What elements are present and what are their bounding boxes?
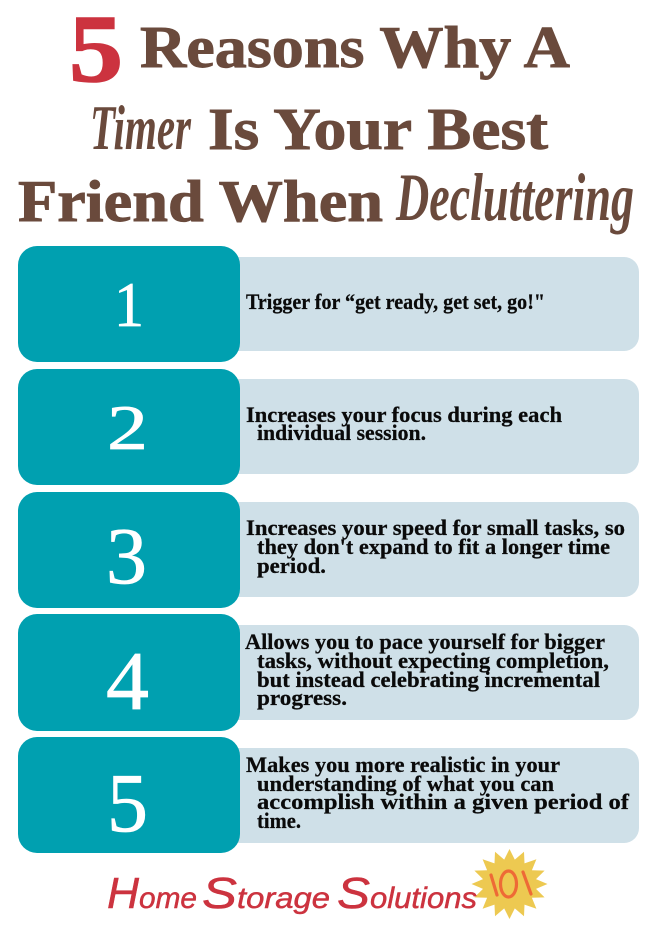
logo wordmark: ome <box>139 882 197 915</box>
row 3 text: they don't expand to fit a longer time <box>257 534 610 559</box>
row 5 number tile <box>18 737 240 853</box>
title line 1: Reasons Why A <box>140 14 570 80</box>
row 4 text: Allows you to pace yourself for bigger <box>245 629 605 654</box>
row 2 number: 2 <box>107 392 148 463</box>
title line 3: Friend When <box>18 168 383 234</box>
logo wordmark: S <box>337 869 370 918</box>
row 4 text: progress. <box>257 685 347 710</box>
row 5 number: 5 <box>107 757 148 850</box>
row 5 text: time. <box>257 808 301 833</box>
title line 2: Is Your Best <box>208 96 548 162</box>
row 3 number tile <box>18 492 240 608</box>
row 2 text: individual session. <box>257 420 426 445</box>
row 2 <box>18 369 639 485</box>
row 3 number: 3 <box>106 513 147 601</box>
row 2 number tile <box>18 369 240 485</box>
row 1 <box>18 246 639 362</box>
title script word Timer: Timer <box>90 92 192 163</box>
row 5 text: accomplish within a given period of <box>257 789 630 814</box>
row 3 text: period. <box>257 553 326 578</box>
row 1 text panel <box>236 257 639 351</box>
row 4 number: 4 <box>106 635 149 728</box>
row 2 text panel <box>236 379 639 474</box>
logo 101 <box>491 871 531 897</box>
row 1 text: Trigger for “get ready, get set, go!" <box>246 289 545 314</box>
row 2 text: Increases your focus during each <box>246 402 562 427</box>
logo wordmark: S <box>202 869 237 918</box>
row 4 <box>18 614 639 731</box>
row 5 <box>18 737 639 853</box>
row 5 text: understanding of what you can <box>257 771 554 796</box>
icon: sun <box>472 849 548 919</box>
row 3 text: Increases your speed for small tasks, so <box>246 515 625 540</box>
row 3 text panel <box>236 502 639 597</box>
logo <box>107 849 548 919</box>
logo wordmark: H <box>107 869 139 918</box>
row 4 text: but instead celebrating incremental <box>257 667 600 692</box>
logo wordmark: olutions <box>370 882 477 915</box>
row 5 text: Makes you more realistic in your <box>246 752 560 777</box>
row 4 number tile <box>18 614 240 731</box>
row 4 text: tasks, without expecting completion, <box>257 648 609 673</box>
row 3 <box>18 492 639 608</box>
row 4 text panel <box>236 625 639 720</box>
row 1 number tile <box>18 246 240 362</box>
logo wordmark: torage <box>237 882 330 915</box>
row 1 number: 1 <box>114 269 144 340</box>
row 5 text panel <box>236 748 639 843</box>
title <box>18 0 634 235</box>
